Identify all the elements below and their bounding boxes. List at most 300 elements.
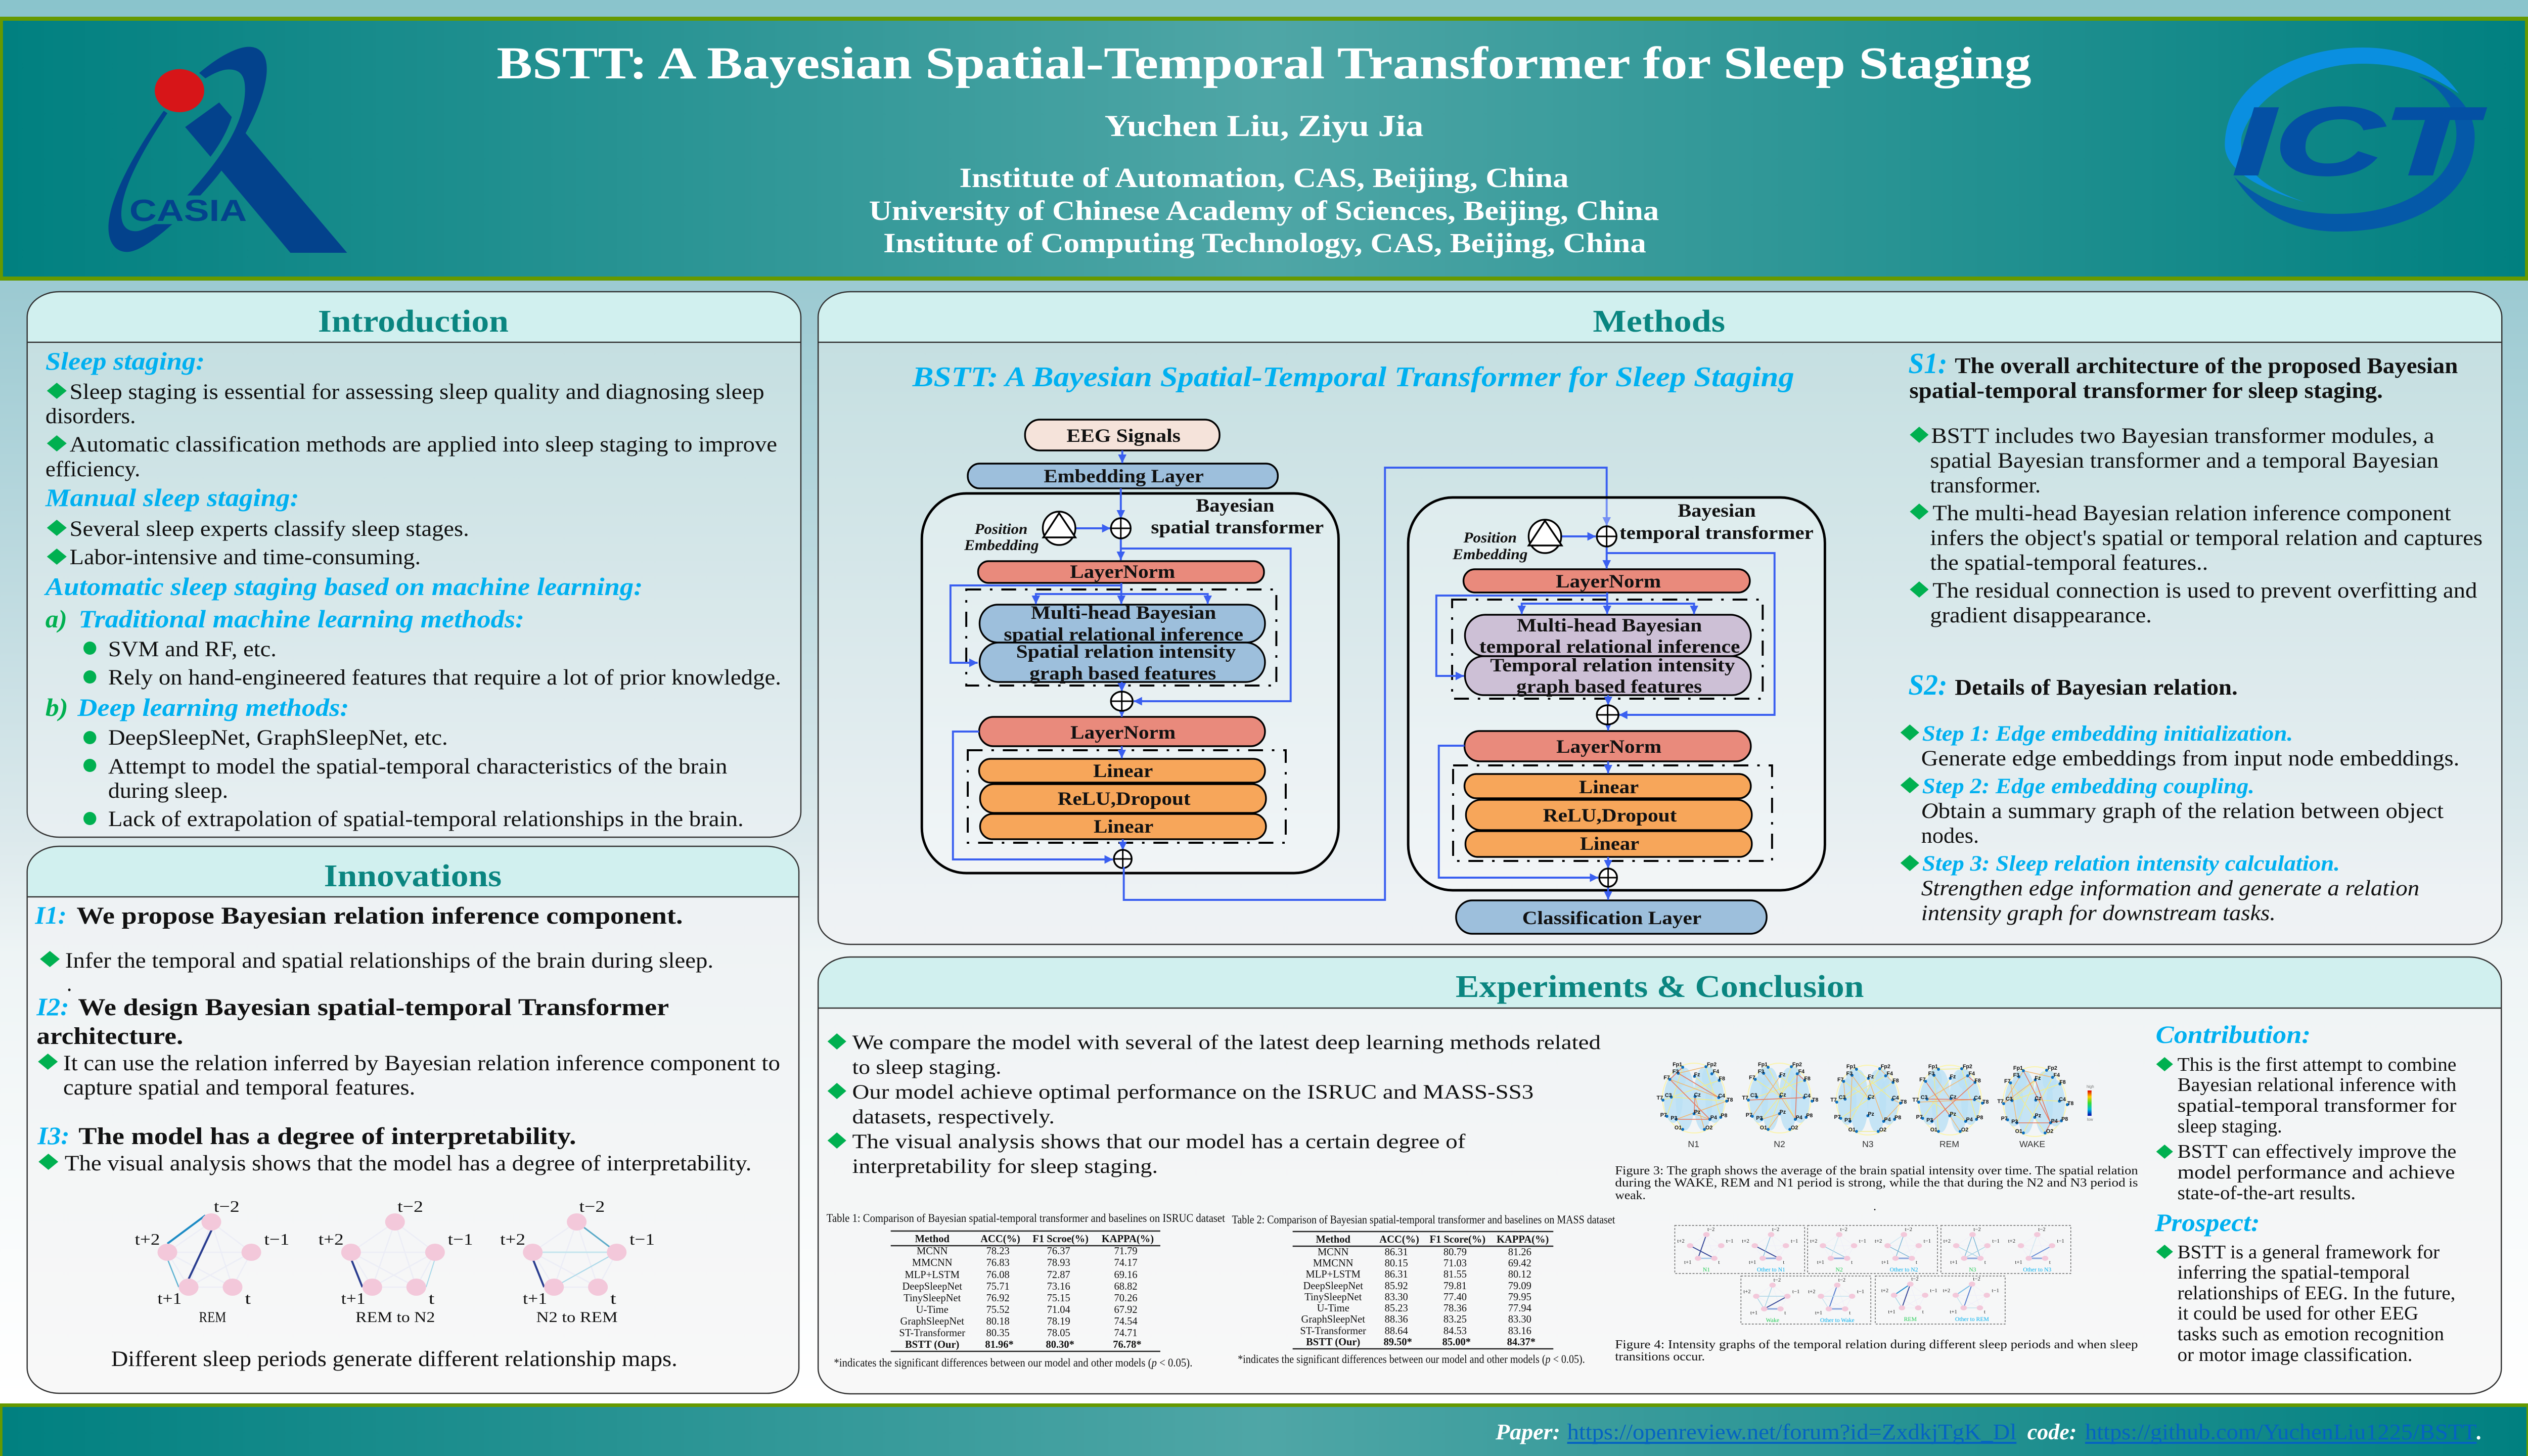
text: innovation 1: . (67, 972, 72, 996)
text: S1 overall architecture: transformer. (1930, 474, 2041, 497)
table 2: MASS comparison: MCNN (1318, 1247, 1348, 1258)
affiliations (869, 162, 1659, 258)
text: S1 overall architecture: The multi-head Bayesian relation inference component (1932, 502, 2451, 525)
diagram: temporal transformer module: ReLU,Dropout (1543, 805, 1677, 826)
caption: relationship maps: Different sleep periods generate different relationship maps. (111, 1347, 678, 1371)
chart: REM to N2 relation graph: t−1 (448, 1231, 473, 1248)
text: automatic sleep staging: a) (46, 605, 67, 633)
chart: N3 brain spatial graph: Fp1 (1846, 1064, 1856, 1070)
text: automatic sleep staging: Attempt to model the spatial-temporal characteristics of the brain (108, 755, 727, 779)
chart: N3 brain spatial graph: N3 (1862, 1139, 1874, 1149)
diagram: spatial transformer module: Embedding Layer (1044, 466, 1204, 486)
table 2: MASS comparison: Method (1316, 1234, 1350, 1245)
chart: WAKE brain spatial graph: P3 (2011, 1119, 2018, 1125)
chart: Wake temporal graphs: t−2 (1774, 1277, 1781, 1283)
chart: WAKE brain spatial graph: F8 (2059, 1079, 2066, 1085)
chart: WAKE brain spatial graph: P4 (2051, 1118, 2058, 1124)
footer links: Paper: (1495, 1420, 1560, 1444)
table 2: MASS comparison: 81.26 (1508, 1247, 1531, 1258)
chart: N2 brain spatial graph: Fp2 (1792, 1062, 1802, 1068)
text: S2 details of Bayesian relation: Generate edge embeddings from input node embeddings. (1921, 747, 2459, 770)
text: S1 overall architecture: The residual connection is used to prevent overfitting and (1932, 579, 2477, 603)
table 1: ISRUC comparison: 70.26 (1114, 1293, 1138, 1304)
chart: N3 temporal graphs: t+2 (1944, 1238, 1951, 1244)
chart: N1 temporal graphs (1675, 1225, 1804, 1273)
table 1: ISRUC comparison: 76.83 (986, 1257, 1010, 1268)
chart: N2 brain spatial graph: Fp1 (1758, 1062, 1768, 1068)
chart: N2 brain spatial graph: O2 (1791, 1125, 1798, 1131)
table 2: MASS comparison: 78.36 (1443, 1303, 1467, 1314)
chart: WAKE brain spatial graph: Pz (2035, 1113, 2041, 1119)
chart: N3 brain spatial graph: Pz (1868, 1111, 1874, 1117)
chart: Wake temporal graphs: Wake (1766, 1316, 1779, 1324)
chart: N3 temporal graphs: t−1 (2057, 1238, 2064, 1244)
table 2: MASS comparison: 71.03 (1443, 1258, 1467, 1269)
chart: N3 brain spatial graph: F7 (1837, 1077, 1843, 1083)
chart: N2 brain spatial graph: T7 (1742, 1095, 1748, 1101)
chart: WAKE brain spatial graph: Cz (2035, 1096, 2042, 1102)
text: S2 details of Bayesian relation: Obtain a summary graph of the relation between object (1921, 799, 2444, 823)
chart: REM brain spatial graph: P8 (1976, 1115, 1983, 1121)
text: automatic sleep staging: during sleep. (108, 779, 228, 803)
chart: N2 brain spatial graph: T8 (1812, 1097, 1819, 1103)
chart: N2 brain spatial graph: Pz (1780, 1109, 1786, 1115)
text: prospect: inferring the spatial-temporal (2178, 1262, 2410, 1283)
text: experiment bullets (828, 1031, 1601, 1177)
chart: REM relation graph: t−2 (214, 1198, 240, 1215)
diagram: temporal transformer module: Multi-head Bayesian (1517, 615, 1702, 635)
chart: WAKE brain spatial graph: O2 (2046, 1128, 2053, 1134)
chart: REM brain spatial graph: P7 (1916, 1114, 1923, 1120)
text: contribution: model performance and achieve (2178, 1162, 2455, 1183)
chart: REM temporal graphs: t−1 (1992, 1288, 1999, 1294)
chart: N1 brain spatial graph: F4 (1713, 1069, 1719, 1075)
chart: REM brain spatial graph: Pz (1950, 1111, 1957, 1117)
footer banner (0, 1403, 2528, 1456)
chart: N2 temporal graphs: t (1851, 1259, 1853, 1265)
text: automatic sleep staging (44, 572, 781, 831)
chart: REM temporal graphs: t+1 (1950, 1309, 1957, 1315)
chart: N3 brain spatial graph: P3 (1844, 1117, 1851, 1123)
text: automatic sleep staging: Rely on hand-engineered features that require a lot of prior knowledge. (108, 666, 781, 690)
chart: N3 brain spatial graph: T7 (1830, 1097, 1837, 1103)
chart: N1 brain spatial graph: Fp1 (1673, 1062, 1682, 1068)
text: contribution: BSTT can effectively improve the (2178, 1142, 2456, 1162)
chart: N3 brain spatial graph: F8 (1892, 1078, 1899, 1084)
chart: N2 brain spatial graph (1742, 1062, 1819, 1149)
table 1: ISRUC comparison (827, 1212, 1225, 1369)
table 2: MASS comparison: ST-Transformer (1300, 1326, 1366, 1337)
diagram: temporal transformer module: LayerNorm (1556, 571, 1661, 592)
chart: N2 brain spatial graph: F4 (1798, 1069, 1804, 1075)
heading: introduction: Introduction (318, 304, 509, 339)
chart: REM relation graph: t+1 (158, 1290, 182, 1307)
diagram: spatial transformer module: Multi-head Bayesian (1031, 602, 1216, 623)
chart: N2 temporal graphs: t+2 (1810, 1238, 1817, 1244)
text: S1 overall architecture: BSTT includes two Bayesian transformer modules, a (1931, 424, 2434, 448)
panel: experiments and conclusion (818, 957, 2501, 1394)
chart: WAKE brain spatial graph: Fz (2035, 1075, 2041, 1081)
table 2: MASS comparison: BSTT (Our) (1306, 1337, 1360, 1348)
table 2: MASS comparison: *indicates the significant differences between our model and other models (p < 0.05). (1238, 1353, 1585, 1366)
panel: introduction (27, 292, 801, 837)
chart: WAKE brain spatial graph: C3 (2006, 1096, 2012, 1102)
table 2: MASS comparison: MMCNN (1313, 1258, 1353, 1269)
chart: N1 temporal graphs: t−1 (1791, 1238, 1798, 1244)
chart: REM brain spatial graph: O2 (1961, 1127, 1968, 1133)
text: S1 overall architecture: gradient disappearance. (1930, 604, 2152, 627)
chart: N2 to REM relation graph: N2 to REM (536, 1309, 618, 1326)
chart: N1 temporal graphs: t+1 (1684, 1259, 1691, 1265)
chart: N2 temporal graphs (1808, 1225, 1937, 1273)
chart: N2 brain spatial graph: P7 (1746, 1112, 1752, 1118)
chart: N1 temporal graphs: t+2 (1742, 1238, 1749, 1244)
text: manual sleep staging (45, 483, 469, 569)
table 2: MASS comparison: 77.40 (1443, 1292, 1467, 1303)
text: prospect: BSTT is a general framework for (2178, 1242, 2440, 1263)
chart: N3 temporal graphs: t+2 (2008, 1238, 2015, 1244)
chart: N2 temporal graphs: t (1916, 1259, 1917, 1265)
chart: REM brain spatial graph: REM (1939, 1139, 1959, 1149)
text: sleep staging: Automatic classification methods are applied into sleep staging to improve (70, 433, 777, 457)
footer links (1495, 1420, 2482, 1444)
table 2: MASS comparison: 86.31 (1385, 1269, 1408, 1280)
chart: N3 brain spatial graph: C3 (1839, 1095, 1845, 1101)
chart: Wake temporal graphs: t−1 (1792, 1289, 1799, 1295)
chart: N3 brain spatial graph: C4 (1892, 1095, 1899, 1101)
chart: REM relation graph: t (245, 1290, 251, 1307)
chart: N2 temporal graphs: t+2 (1875, 1238, 1882, 1244)
chart: REM to N2 relation graph: t (429, 1290, 435, 1307)
chart: N1 temporal graphs: t (1718, 1259, 1720, 1265)
footer links: . (2476, 1420, 2482, 1444)
table 2: MASS comparison: 80.12 (1508, 1269, 1531, 1280)
diagram: temporal transformer module: Temporal relation intensity (1490, 655, 1735, 675)
table 1: ISRUC comparison: 76.08 (986, 1269, 1010, 1281)
table 1: ISRUC comparison: 80.18 (986, 1316, 1010, 1327)
chart: N2 brain spatial graph: N2 (1774, 1139, 1785, 1149)
chart: N2 brain spatial graph: C3 (1750, 1093, 1757, 1099)
text: experiment bullets: We compare the model with several of the latest deep learning methods related (852, 1031, 1601, 1054)
diagram: spatial transformer module: spatial transformer (1151, 517, 1324, 537)
table 2: MASS comparison: 83.16 (1508, 1326, 1531, 1337)
diagram: spatial transformer module: Spatial relation intensity (1016, 641, 1236, 662)
table 1: ISRUC comparison: 81.96* (985, 1339, 1014, 1350)
affiliations: University of Chinese Academy of Sciences, Beijing, China (869, 195, 1659, 226)
panel: innovations (27, 846, 799, 1393)
text: S1 overall architecture: spatial-temporal transformer for sleep staging. (1909, 379, 2383, 403)
chart: N3 brain spatial graph: P4 (1884, 1117, 1891, 1123)
diagram: spatial transformer module: Linear (1094, 816, 1153, 837)
chart: N1 brain spatial graph: N1 (1688, 1139, 1699, 1149)
text: experiment bullets: Our model achieve optimal performance on the ISRUC and MASS-SS3 (852, 1081, 1533, 1103)
table 1: ISRUC comparison: 78.93 (1047, 1257, 1070, 1268)
table 1: ISRUC comparison: 75.15 (1047, 1293, 1070, 1304)
chart: Wake temporal graphs: t−2 (1838, 1277, 1845, 1283)
text: manual sleep staging: Manual sleep staging: (45, 483, 299, 512)
table 2: MASS comparison: 85.00* (1442, 1337, 1471, 1348)
text: automatic sleep staging: Deep learning methods: (77, 693, 349, 721)
chart: N1 temporal graphs: Other to N1 (1757, 1266, 1785, 1273)
chart: N2 brain spatial graph: F8 (1804, 1076, 1811, 1082)
text: manual sleep staging: Several sleep experts classify sleep stages. (70, 517, 469, 541)
text: experiment bullets: to sleep staging. (852, 1056, 1001, 1078)
text: S2 details of Bayesian relation: Step 2: Edge embedding coupling. (1922, 775, 2254, 798)
table 2: MASS comparison: 77.94 (1508, 1303, 1532, 1314)
table 2: MASS comparison: TinySleepNet (1304, 1292, 1362, 1303)
chart: N3 brain spatial graph: F4 (1886, 1071, 1893, 1077)
text: automatic sleep staging: DeepSleepNet, GraphSleepNet, etc. (108, 726, 448, 750)
chart: Wake temporal graphs: Other to Wake (1820, 1316, 1855, 1324)
text: S1 overall architecture (1908, 347, 2482, 627)
chart: WAKE brain spatial graph: WAKE (2019, 1139, 2045, 1149)
table 1: ISRUC comparison: 72.87 (1047, 1269, 1070, 1281)
table 1: ISRUC comparison: 76.37 (1047, 1246, 1070, 1257)
chart: N1 brain spatial graph: C4 (1718, 1093, 1725, 1099)
table 1: ISRUC comparison: DeepSleepNet (902, 1281, 962, 1292)
table 1: ISRUC comparison: 75.52 (986, 1304, 1010, 1315)
legend: color bar: high (2087, 1084, 2094, 1089)
chart: N2 brain spatial graph: P4 (1796, 1115, 1802, 1121)
chart: WAKE brain spatial graph: P8 (2061, 1116, 2068, 1122)
caption: figure 3: . (1873, 1200, 1876, 1213)
text: S2 details of Bayesian relation: Step 3: Sleep relation intensity calculation. (1922, 852, 2340, 876)
diagram: spatial transformer module: spatial relational inference (1004, 624, 1243, 645)
chart: Wake temporal graphs: t+1 (1815, 1310, 1822, 1316)
chart: N3 brain spatial graph: T8 (1901, 1099, 1907, 1105)
table 2: MASS comparison: 79.81 (1443, 1281, 1467, 1292)
table 2: MASS comparison: Table 2: Comparison of Bayesian spatial-temporal transformer and baselines on MASS dataset (1232, 1213, 1615, 1226)
text: automatic sleep staging: b) (46, 693, 68, 721)
chart: N1 brain spatial graph: O1 (1675, 1125, 1682, 1131)
table 1: ISRUC comparison: 75.71 (986, 1281, 1010, 1292)
chart: N1 brain spatial graph (1657, 1062, 1733, 1149)
chart: REM temporal graphs: t−2 (1973, 1276, 1980, 1282)
chart: N3 brain spatial graph: P8 (1894, 1115, 1901, 1121)
diagram: temporal transformer module (1408, 497, 1825, 934)
table 2: MASS comparison: 86.31 (1385, 1247, 1408, 1258)
chart: N2 to REM relation graph: t−1 (629, 1231, 655, 1248)
chart: WAKE brain spatial graph: F4 (2054, 1072, 2060, 1078)
chart: N3 brain spatial graph (1830, 1064, 1907, 1149)
chart: N3 temporal graphs: N3 (1969, 1266, 1976, 1273)
chart: WAKE brain spatial graph: O1 (2015, 1128, 2022, 1134)
table 1: ISRUC comparison: 67.92 (1114, 1304, 1138, 1315)
chart: REM temporal graphs: Other to REM (1955, 1315, 1989, 1323)
chart: N2 brain spatial graph: Fz (1780, 1072, 1786, 1078)
text: S2 details of Bayesian relation: nodes. (1921, 824, 1979, 848)
chart: N1 brain spatial graph: Fz (1694, 1072, 1700, 1078)
chart: N1 brain spatial graph: F3 (1673, 1069, 1679, 1075)
text: S2 details of Bayesian relation (1901, 669, 2459, 925)
table 1: ISRUC comparison: 74.54 (1114, 1316, 1138, 1327)
chart: N3 brain spatial graph: O1 (1848, 1127, 1856, 1133)
table 1: ISRUC comparison: Table 1: Comparison of Bayesian spatial-temporal transformer and baselines on ISRUC dataset (827, 1212, 1225, 1224)
chart: N3 temporal graphs: t+1 (2015, 1259, 2022, 1265)
table 2: MASS comparison: 85.92 (1385, 1281, 1408, 1292)
diagram: spatial transformer module: Embedding (964, 537, 1039, 554)
chart: N2 temporal graphs: t−2 (1840, 1226, 1847, 1233)
chart: N1 brain spatial graph: F8 (1719, 1076, 1725, 1082)
table 2: MASS comparison: GraphSleepNet (1301, 1314, 1365, 1325)
chart: N1 temporal graphs: t+2 (1677, 1238, 1685, 1244)
icon: ICT logo: ICT (2233, 87, 2486, 195)
chart: N2 to REM relation graph: t+1 (523, 1290, 547, 1307)
caption: figure 4: Figure 4: Intensity graphs of the temporal relation during different sleep periods and when sleep (1615, 1338, 2138, 1351)
text: sleep staging: Sleep staging is essential for assessing sleep quality and diagnosing sleep (70, 380, 764, 404)
panel: methods (818, 292, 2502, 944)
text: contribution: Bayesian relational inference with (2178, 1075, 2457, 1096)
chart: REM brain spatial graph: O1 (1930, 1127, 1937, 1133)
diagram: spatial transformer module: Position (974, 521, 1027, 537)
table 1: ISRUC comparison: TinySleepNet (904, 1293, 961, 1304)
diagram: temporal transformer module: Classification Layer (1522, 907, 1701, 928)
chart: N3 brain spatial graph: Fz (1868, 1074, 1874, 1080)
diagram: spatial transformer module (922, 420, 1338, 873)
table 2: MASS comparison: 80.15 (1385, 1258, 1408, 1269)
chart: Wake temporal graphs: t+1 (1750, 1310, 1757, 1316)
chart: REM brain spatial graph: F4 (1969, 1071, 1975, 1077)
text: S1 overall architecture: S1: (1908, 347, 1948, 380)
heading: methods: Methods (1593, 304, 1725, 339)
chart: REM brain spatial graph: F3 (1928, 1071, 1934, 1077)
text: contribution: Contribution: (2156, 1020, 2311, 1049)
table 2: MASS comparison: 69.42 (1508, 1258, 1531, 1269)
table 1: ISRUC comparison: 69.16 (1114, 1269, 1138, 1281)
text: sleep staging (46, 347, 777, 481)
chart: Wake temporal graphs: t (1849, 1310, 1850, 1316)
chart: N2 brain spatial graph: F3 (1758, 1069, 1764, 1075)
table 1: ISRUC comparison: 71.04 (1047, 1304, 1070, 1315)
table 1: ISRUC comparison: 73.16 (1047, 1281, 1070, 1292)
table 1: ISRUC comparison: KAPPA(%) (1102, 1234, 1154, 1245)
diagram: temporal transformer module: temporal transformer (1619, 522, 1814, 543)
diagram: spatial transformer module: graph based features (1029, 663, 1216, 684)
chart: REM brain spatial graph: C3 (1921, 1095, 1927, 1101)
footer links: code: (2027, 1420, 2076, 1444)
text: S2 details of Bayesian relation: Step 1: Edge embedding initialization. (1922, 722, 2293, 746)
chart: REM to N2 relation graph: t−2 (397, 1198, 423, 1215)
chart: N1 brain spatial graph: Cz (1694, 1092, 1701, 1098)
text: innovation 2: capture spatial and temporal features. (63, 1076, 415, 1100)
chart: N1 brain spatial graph: P7 (1660, 1112, 1667, 1118)
table 1: ISRUC comparison: 68.82 (1114, 1281, 1138, 1292)
chart: N3 brain spatial graph: Fp2 (1881, 1064, 1890, 1070)
diagram: temporal transformer module: Linear (1579, 777, 1639, 797)
table 1: ISRUC comparison: 80.30* (1046, 1339, 1074, 1350)
table 2: MASS comparison: F1 Score(%) (1429, 1234, 1485, 1245)
chart: REM brain spatial graph: C4 (1974, 1095, 1981, 1101)
chart: REM brain spatial graph: P4 (1966, 1117, 1973, 1123)
chart: N1 brain spatial graph: Fp2 (1707, 1062, 1717, 1068)
text: innovation 1 (34, 901, 713, 996)
icon: CASIA logo: CASIA (129, 193, 247, 228)
text: prospect: Prospect: (2154, 1208, 2260, 1237)
chart: N2 to REM relation graph: t (610, 1290, 616, 1307)
diagram: spatial transformer module: LayerNorm (1070, 561, 1175, 582)
chart: N3 temporal graphs: t (1984, 1259, 1986, 1265)
chart: N2 temporal graphs: t−1 (1859, 1238, 1866, 1244)
text: innovation 2: It can use the relation inferred by Bayesian relation inference component to (63, 1052, 780, 1075)
text: experiment bullets: datasets, respectively. (852, 1106, 1055, 1128)
diagram: temporal transformer module: Embedding (1452, 547, 1528, 563)
text: experiment bullets: The visual analysis shows that our model has a certain degree of (852, 1130, 1466, 1153)
chart: N3 temporal graphs: t−2 (2038, 1226, 2046, 1233)
chart: N1 brain spatial graph: P4 (1710, 1115, 1717, 1121)
text: innovation 1: We propose Bayesian relation inference component. (76, 903, 683, 929)
text: sleep staging: efficiency. (46, 458, 140, 481)
chart: WAKE brain spatial graph (1997, 1065, 2073, 1149)
chart: N1 temporal graphs: t−2 (1772, 1226, 1779, 1233)
text: contribution: sleep staging. (2178, 1116, 2282, 1137)
table 1: ISRUC comparison: BSTT (Our) (905, 1339, 959, 1350)
diagram: temporal transformer module: temporal relational inference (1479, 636, 1740, 657)
text: S2 details of Bayesian relation: intensity graph for downstream tasks. (1921, 901, 2276, 925)
chart: N3 brain spatial graph: Cz (1868, 1094, 1875, 1100)
chart: N3 brain spatial graph: O2 (1879, 1127, 1886, 1133)
chart: N3 temporal graphs: t−2 (1973, 1226, 1981, 1233)
chart: REM temporal graphs: t−1 (1930, 1288, 1937, 1294)
chart: REM relation graph: t−1 (264, 1231, 289, 1248)
text: innovation 3: I3: (37, 1121, 70, 1150)
table 1: ISRUC comparison: 74.17 (1114, 1257, 1138, 1268)
chart: N1 temporal graphs: t−1 (1726, 1238, 1733, 1244)
diagram: spatial transformer module: ReLU,Dropout (1058, 788, 1191, 809)
header banner (0, 17, 2528, 281)
text: automatic sleep staging: Traditional machine learning methods: (78, 605, 524, 633)
table 2: MASS comparison: U-Time (1317, 1303, 1349, 1314)
table 2: MASS comparison: 89.50* (1383, 1337, 1412, 1348)
table 1: ISRUC comparison: MLP+LSTM (905, 1269, 960, 1281)
chart: N2 brain spatial graph: F7 (1749, 1075, 1755, 1081)
table 2: MASS comparison: 88.64 (1385, 1326, 1408, 1337)
table 2: MASS comparison: 83.30 (1508, 1314, 1531, 1325)
chart: N1 temporal graphs: t−2 (1707, 1226, 1714, 1233)
chart: N2 temporal graphs: Other to N2 (1890, 1266, 1918, 1273)
table 1: ISRUC comparison: 71.79 (1114, 1246, 1138, 1257)
text: automatic sleep staging: Automatic sleep staging based on machine learning: (44, 572, 643, 601)
diagram: spatial transformer module: EEG Signals (1066, 425, 1181, 446)
chart: Wake temporal graphs: t+2 (1743, 1289, 1751, 1295)
text: sleep staging: Sleep staging: (46, 347, 205, 375)
text: S1 overall architecture: spatial Bayesian transformer and a temporal Bayesian (1930, 449, 2439, 473)
chart: REM brain spatial graph: Cz (1950, 1094, 1957, 1100)
text: sleep staging: disorders. (46, 404, 136, 428)
table 1: ISRUC comparison: ACC(%) (980, 1234, 1020, 1245)
text: innovation 2: architecture. (36, 1023, 183, 1050)
chart: N3 brain spatial graph: F3 (1846, 1071, 1853, 1077)
chart: Wake temporal graphs: t+2 (1808, 1289, 1816, 1295)
chart: REM brain spatial graph: F8 (1974, 1078, 1981, 1084)
table 1: ISRUC comparison: *indicates the significant differences between our model and other models (p < 0.05). (834, 1356, 1192, 1369)
text: automatic sleep staging: SVM and RF, etc. (108, 638, 277, 661)
table 2: MASS comparison: 83.30 (1385, 1292, 1408, 1303)
chart: N3 temporal graphs: Other to N3 (2023, 1266, 2051, 1273)
chart: WAKE brain spatial graph: T8 (2067, 1101, 2073, 1107)
icon: CASIA logo (108, 47, 347, 253)
table 1: ISRUC comparison: U-Time (916, 1304, 949, 1315)
text: prospect: or motor image classification. (2178, 1345, 2412, 1366)
chart: REM brain spatial graph: T8 (1982, 1099, 1989, 1105)
chart: REM temporal graphs (1875, 1276, 2005, 1324)
caption: figure 3: Figure 3: The graph shows the average of the brain spatial intensity over time. The spatial relation (1615, 1164, 2138, 1177)
text: innovation 2: We design Bayesian spatial-temporal Transformer (78, 994, 669, 1021)
text: manual sleep staging: Labor-intensive and time-consuming. (70, 545, 421, 569)
chart: WAKE brain spatial graph: F7 (2004, 1078, 2011, 1084)
text: innovation 3 (37, 1121, 751, 1175)
text: innovation 3: The visual analysis shows that the model has a degree of interpretability. (65, 1152, 751, 1175)
chart: Wake temporal graphs: t−1 (1857, 1289, 1864, 1295)
